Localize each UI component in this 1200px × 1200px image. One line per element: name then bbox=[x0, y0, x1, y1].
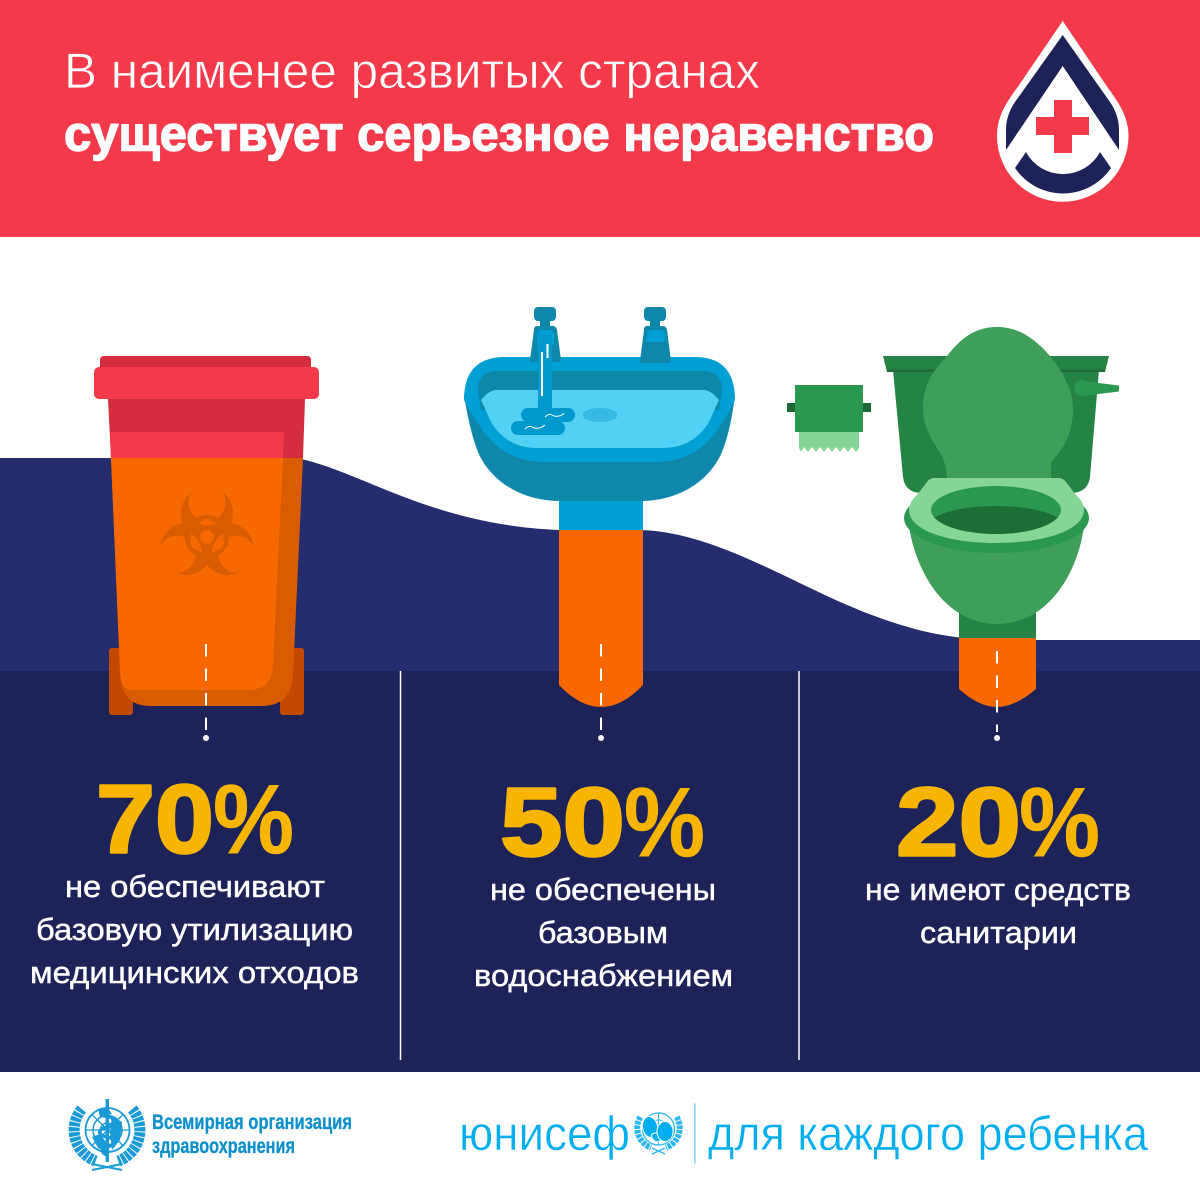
icon: toilet bbox=[883, 327, 1119, 707]
stat column: sanitation bbox=[865, 767, 1131, 950]
icon: blood drop with cross bbox=[997, 21, 1128, 202]
icon: toilet paper roll bbox=[787, 385, 871, 452]
water bbox=[481, 390, 719, 448]
toilet seat bbox=[909, 478, 1084, 543]
percentage 70: % bbox=[213, 764, 294, 874]
bin wheels bbox=[109, 648, 304, 715]
percentage 70 bbox=[96, 764, 294, 874]
description: медицинских отходов bbox=[30, 955, 359, 990]
description: не обеспечивают bbox=[65, 869, 325, 904]
toilet opening bbox=[931, 486, 1061, 534]
tap inner bbox=[537, 330, 554, 345]
basin well bbox=[478, 371, 722, 410]
WHO name: Всемирная организация bbox=[152, 1111, 352, 1134]
percentage 20: 20 bbox=[896, 768, 1021, 876]
running water bbox=[511, 335, 575, 435]
description: не имеют средств bbox=[865, 872, 1131, 907]
pedestal bbox=[559, 495, 643, 531]
icon: sink bbox=[464, 307, 735, 531]
wave background bbox=[0, 458, 1200, 672]
percentage 20: % bbox=[1019, 767, 1100, 877]
dashed connector: sink bbox=[598, 644, 604, 741]
description: не обеспечены bbox=[490, 872, 716, 907]
header band bbox=[0, 0, 1200, 237]
description bbox=[865, 872, 1131, 950]
percentage 50: 50 bbox=[500, 768, 625, 876]
basin rim bbox=[464, 357, 735, 462]
description: базовым bbox=[538, 915, 668, 950]
WHO name bbox=[152, 1111, 352, 1158]
description: санитарии bbox=[920, 915, 1077, 950]
bin orange body bbox=[111, 458, 303, 706]
flush handle bbox=[1074, 380, 1119, 396]
percentage 50 bbox=[500, 767, 705, 877]
logo: UNICEF bbox=[459, 1104, 1148, 1164]
toilet lid bbox=[923, 327, 1073, 482]
icon: biohazard waste bin bbox=[94, 356, 319, 715]
bin lid bbox=[94, 356, 319, 399]
bin upper body bbox=[108, 399, 305, 458]
description bbox=[30, 869, 359, 990]
right tap bbox=[640, 307, 671, 363]
logo: WHO bbox=[74, 1099, 352, 1170]
toilet bowl bbox=[909, 527, 1084, 624]
description: водоснабжением bbox=[474, 958, 733, 993]
WHO name: здравоохранения bbox=[152, 1135, 295, 1158]
column dividers bbox=[400, 671, 799, 1060]
left tap bbox=[530, 307, 561, 362]
UNICEF divider bbox=[694, 1104, 696, 1164]
toilet tank bbox=[883, 356, 1109, 493]
WHO emblem bbox=[74, 1099, 140, 1170]
UNICEF slogan: для каждого ребенка bbox=[708, 1108, 1148, 1161]
percentage 50: % bbox=[624, 767, 705, 877]
drain bbox=[582, 408, 618, 422]
toilet pipe bbox=[959, 600, 1036, 639]
basin body bbox=[464, 395, 735, 501]
UNICEF wordmark: юнисеф bbox=[459, 1108, 630, 1161]
title: В наименее развитых странах bbox=[64, 43, 760, 99]
dark navy stats panel bbox=[0, 671, 1200, 1072]
description bbox=[474, 872, 733, 993]
UNICEF emblem bbox=[637, 1113, 680, 1154]
title: существует серьезное неравенство bbox=[64, 108, 934, 162]
bowl rim bbox=[904, 483, 1089, 553]
dashed connector: bin bbox=[203, 644, 209, 741]
percentage 20 bbox=[896, 767, 1100, 877]
stat column: water bbox=[474, 767, 733, 993]
sink pedestal orange bbox=[559, 530, 643, 707]
toilet pipe orange bbox=[959, 638, 1036, 707]
title bbox=[64, 43, 934, 162]
biohazard symbol bbox=[160, 492, 254, 575]
stat column: medical waste bbox=[30, 764, 359, 990]
percentage 70: 70 bbox=[96, 764, 214, 874]
description: базовую утилизацию bbox=[36, 912, 353, 947]
dashed connector: toilet bbox=[994, 651, 1000, 741]
